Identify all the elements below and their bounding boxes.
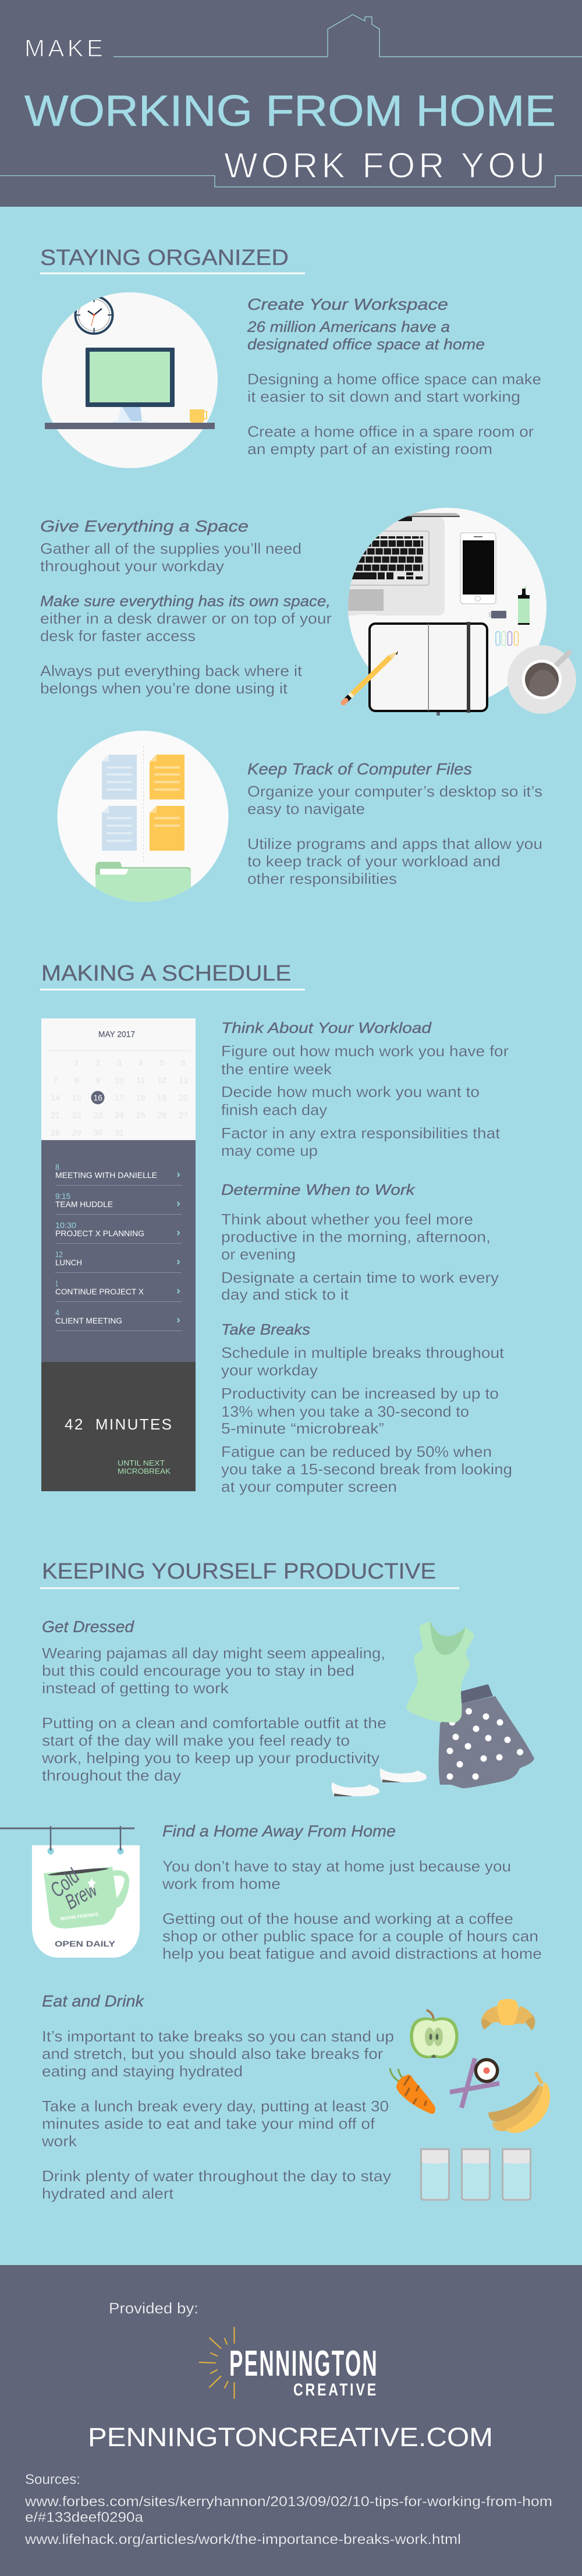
- text block: take breaks: Productivity can be increased by up to: [221, 1385, 499, 1402]
- schedule list: [41, 1140, 196, 1362]
- text block: get dressed: Get Dressed: [42, 1618, 134, 1636]
- text block: determine when to work: Determine When to Work: [221, 1181, 416, 1198]
- schedule list: TEAM HUDDLE: [55, 1200, 113, 1209]
- calendar month view: 2: [95, 1058, 100, 1067]
- text block: find a home away from home: Getting out of the house and working at a coffee: [162, 1910, 513, 1927]
- calendar month view: 25: [136, 1110, 146, 1120]
- calendar month view: [41, 1018, 196, 1140]
- calendar month view: 17: [115, 1093, 124, 1102]
- calendar month view: 26: [158, 1110, 166, 1120]
- text block: create your workspace: Create a home office in a spare room or: [247, 423, 534, 440]
- sources: Sources:: [25, 2472, 80, 2487]
- text block: get dressed: work, helping you to keep up your productivity: [41, 1749, 379, 1767]
- calendar month view: 14: [51, 1093, 60, 1102]
- logo: pennington creative: [199, 2327, 378, 2400]
- sources: [24, 2472, 552, 2547]
- icon: cold brew mug: Cold: [45, 1864, 84, 1902]
- text block: determine when to work: Designate a certain time to work every: [221, 1269, 499, 1286]
- text block: give everything a space: Always put everything back where it: [40, 662, 303, 680]
- icon: water glasses: [421, 2149, 531, 2200]
- text block: create your workspace: Create Your Workspace: [247, 295, 448, 313]
- text block: give everything a space: desk for faster access: [40, 627, 196, 645]
- text block: take breaks: 13% when you take a 30-second to: [221, 1403, 469, 1420]
- calendar month view: 21: [51, 1110, 60, 1120]
- text block: take breaks: Take Breaks: [221, 1321, 310, 1338]
- text block: give everything a space: belongs when you’re done using it: [40, 680, 288, 697]
- text block: find a home away from home: shop or other public space for a couple of hours can: [162, 1927, 538, 1945]
- calendar month view: 23: [94, 1110, 102, 1120]
- text block: eat and drink: Eat and Drink: [42, 1992, 145, 2010]
- calendar month view: 8: [74, 1075, 79, 1085]
- schedule list: 9:15: [55, 1191, 70, 1201]
- text block: eat and drink: work: [41, 2132, 77, 2150]
- text block: think about your workload: finish each day: [221, 1101, 327, 1119]
- icon: usb drive: [489, 611, 506, 618]
- text block: get dressed: throughout the day: [42, 1767, 181, 1784]
- calendar month view: 16: [94, 1093, 102, 1102]
- icon: coffee cup: [508, 645, 576, 714]
- text block: find a home away from home: work from home: [162, 1875, 281, 1892]
- calendar month view: 31: [115, 1128, 124, 1137]
- calendar month view: 20: [179, 1093, 188, 1102]
- microbreak countdown: 42 MINUTES: [65, 1416, 172, 1433]
- heading: making a schedule: MAKING A SCHEDULE: [41, 961, 291, 986]
- title: working from home: WORKING FROM HOME: [24, 86, 556, 135]
- heading: keeping yourself productive: KEEPING YOURSELF PRODUCTIVE: [42, 1559, 436, 1584]
- calendar month view: 11: [136, 1075, 145, 1085]
- icon: smartphone: [460, 533, 496, 604]
- provided by label: Provided by:: [109, 2299, 198, 2317]
- icon: polka dot skirt: [439, 1685, 534, 1788]
- text block: take breaks: [221, 1321, 512, 1495]
- text block: get dressed: Putting on a clean and comfortable outfit at the: [42, 1714, 386, 1732]
- text block: give everything a space: Give Everything a Space: [40, 517, 249, 535]
- sources: www.lifehack.org/articles/work/the-importance-breaks-work.html: [24, 2532, 461, 2547]
- text block: keep track of computer files: easy to navigate: [247, 800, 365, 818]
- icon: yellow document: [150, 755, 184, 799]
- schedule list: 10:30: [55, 1220, 76, 1230]
- text block: keep track of computer files: [247, 760, 542, 887]
- illustration: computer files and folder: [57, 731, 228, 908]
- text block: eat and drink: [41, 1992, 394, 2202]
- calendar month view: 1: [74, 1058, 79, 1067]
- text block: determine when to work: or evening: [221, 1245, 296, 1263]
- schedule list: CLIENT MEETING: [55, 1317, 122, 1325]
- text block: eat and drink: hydrated and alert: [42, 2185, 174, 2202]
- icon: wall clock: [76, 296, 113, 334]
- text block: create your workspace: designated office space at home: [247, 335, 485, 353]
- text block: give everything a space: Gather all of the supplies you’ll need: [40, 540, 301, 557]
- icon: apple half: [410, 2010, 459, 2058]
- title: make: MAKE: [24, 34, 103, 62]
- schedule list: LUNCH: [55, 1258, 82, 1267]
- text block: keep track of computer files: Organize your computer’s desktop so it’s: [247, 783, 542, 800]
- text block: eat and drink: Drink plenty of water throughout the day to stay: [42, 2167, 391, 2185]
- calendar app panel: [41, 1018, 196, 1491]
- icon: yellow mug: [190, 409, 207, 423]
- icon: green folder: [95, 862, 191, 902]
- icon: carrot: [390, 2068, 435, 2114]
- text block: take breaks: your workday: [221, 1361, 318, 1379]
- calendar month view: 24: [115, 1110, 124, 1120]
- text block: eat and drink: minutes aside to eat and take your mind off of: [42, 2115, 375, 2132]
- calendar month view: MAY 2017: [98, 1030, 135, 1039]
- icon: highlighter: [518, 586, 530, 625]
- illustration: outfit: [332, 1621, 534, 1796]
- calendar month view: 13: [179, 1075, 188, 1085]
- text block: get dressed: instead of getting to work: [42, 1679, 229, 1697]
- schedule list: 12: [55, 1250, 63, 1259]
- text block: eat and drink: Take a lunch break every day, putting at least 30: [42, 2097, 389, 2115]
- calendar month view: 6: [181, 1058, 186, 1067]
- calendar month view: 19: [158, 1093, 166, 1102]
- text block: get dressed: but this could encourage you to stay in bed: [42, 1662, 354, 1679]
- text block: think about your workload: [221, 1019, 509, 1159]
- microbreak countdown: UNTIL NEXT: [118, 1459, 165, 1467]
- text block: create your workspace: Designing a home office space can make: [247, 370, 541, 388]
- icon: yellow document 2: [150, 806, 184, 851]
- text block: think about your workload: Factor in any extra responsibilities that: [221, 1124, 501, 1142]
- illustration: coffee shop sign: OPEN DAILY: [55, 1939, 116, 1948]
- calendar month view: 29: [72, 1128, 81, 1137]
- icon: pencil: [343, 651, 398, 703]
- schedule list: 4: [55, 1308, 59, 1317]
- calendar month view: 12: [158, 1075, 166, 1085]
- text block: give everything a space: either in a desk drawer or on top of your: [40, 610, 332, 627]
- text block: take breaks: Schedule in multiple breaks throughout: [221, 1344, 505, 1361]
- sources: www.forbes.com/sites/kerryhannon/2013/09/02/10-tips-for-working-from-hom: [24, 2494, 552, 2510]
- icon: cold brew mug: WARM FRIENDS: [60, 1912, 99, 1922]
- text block: think about your workload: Decide how much work you want to: [221, 1083, 480, 1101]
- header banner: [0, 0, 582, 207]
- text block: take breaks: at your computer screen: [221, 1478, 397, 1495]
- text block: find a home away from home: You don’t have to stay at home just because you: [162, 1857, 511, 1875]
- text block: give everything a space: [40, 517, 332, 697]
- text block: think about your workload: may come up: [221, 1142, 318, 1159]
- calendar month view: 5: [159, 1058, 164, 1067]
- icon: blue document 2: [102, 806, 137, 851]
- house outline line: [113, 15, 582, 57]
- text block: eat and drink: and stretch, but you should also take breaks for: [42, 2045, 383, 2062]
- title: work for you: WORK FOR YOU: [224, 146, 545, 185]
- calendar month view: 30: [94, 1128, 102, 1137]
- text block: create your workspace: an empty part of an existing room: [247, 440, 492, 458]
- text block: create your workspace: it easier to sit down and start working: [247, 388, 520, 405]
- illustration: coffee shop sign: [0, 1826, 140, 1958]
- schedule list: CONTINUE PROJECT X: [55, 1287, 144, 1296]
- illustration: desktop flat lay: [326, 508, 576, 716]
- icon: paper clips: [496, 631, 518, 645]
- sign holes: [48, 1848, 123, 1855]
- text block: determine when to work: productive in the morning, afternoon,: [221, 1228, 491, 1245]
- calendar month view: 7: [53, 1075, 58, 1085]
- website url: PENNINGTONCREATIVE.COM: [88, 2422, 493, 2452]
- text block: keep track of computer files: other responsibilities: [247, 870, 397, 887]
- calendar month view: 18: [136, 1093, 146, 1102]
- text block: get dressed: [41, 1618, 386, 1784]
- logo: pennington creative: CREATIVE: [293, 2380, 378, 2400]
- text block: think about your workload: Figure out how much work you have for: [221, 1042, 509, 1060]
- text block: eat and drink: eating and staying hydrated: [42, 2062, 243, 2080]
- sign hangers: [51, 1826, 120, 1850]
- calendar month view: 4: [139, 1058, 143, 1067]
- microbreak countdown: MICROBREAK: [118, 1467, 171, 1475]
- sources: e/#133deef0290a: [25, 2510, 144, 2525]
- text block: find a home away from home: help you beat fatigue and avoid distractions at home: [162, 1945, 542, 1962]
- icon: green tank top: [406, 1621, 474, 1722]
- text block: find a home away from home: Find a Home Away From Home: [162, 1822, 396, 1840]
- illustration: food and water: [390, 1999, 550, 2200]
- calendar month view: 3: [117, 1058, 122, 1067]
- footer panel: [0, 2265, 582, 2576]
- icon: white flats: [332, 1768, 427, 1796]
- text block: determine when to work: day and stick to it: [221, 1286, 349, 1303]
- text block: think about your workload: Think About Your Workload: [221, 1019, 432, 1036]
- calendar month view: 27: [179, 1110, 188, 1120]
- text block: eat and drink: It’s important to take breaks so you can stand up: [42, 2027, 394, 2045]
- icon: monitor: [86, 348, 175, 423]
- calendar month view: 15: [72, 1093, 81, 1102]
- text block: keep track of computer files: Utilize programs and apps that allow you: [247, 835, 542, 852]
- text block: find a home away from home: [162, 1822, 542, 1962]
- icon: croissant: [481, 1999, 535, 2030]
- sign board: [32, 1845, 140, 1958]
- calendar month view: 9: [95, 1075, 100, 1085]
- text block: determine when to work: [221, 1181, 499, 1303]
- text block: think about your workload: the entire week: [221, 1060, 332, 1078]
- text block: get dressed: start of the day will make you feel ready to: [42, 1732, 350, 1749]
- text block: take breaks: Fatigue can be reduced by 50% when: [221, 1443, 492, 1460]
- icon: notebook: [370, 622, 487, 716]
- schedule list: 8: [55, 1162, 59, 1172]
- schedule list: MEETING WITH DANIELLE: [55, 1171, 157, 1180]
- icon: cold brew mug: [44, 1864, 129, 1929]
- icon: bananas: [488, 2072, 550, 2133]
- bracket line under title: [0, 176, 582, 187]
- text block: get dressed: Wearing pajamas all day might seem appealing,: [42, 1644, 385, 1662]
- text block: keep track of computer files: to keep track of your workload and: [247, 852, 501, 870]
- calendar month view: 10: [115, 1075, 124, 1085]
- illustration: desk with monitor, clock and mug: [42, 292, 218, 468]
- icon: blue document: [102, 755, 137, 799]
- text block: create your workspace: [247, 295, 541, 458]
- icon: laptop: [348, 513, 460, 615]
- text block: keep track of computer files: Keep Track of Computer Files: [247, 760, 472, 778]
- logo: pennington creative: PENNINGTON: [229, 2344, 378, 2384]
- text block: give everything a space: throughout your workday: [40, 557, 224, 575]
- schedule list: 1: [55, 1279, 58, 1288]
- text block: determine when to work: Think about whether you feel more: [221, 1211, 473, 1228]
- heading: staying organized: STAYING ORGANIZED: [40, 246, 289, 270]
- text block: take breaks: 5-minute “microbreak”: [221, 1420, 384, 1437]
- microbreak countdown: [41, 1362, 196, 1491]
- schedule list: PROJECT X PLANNING: [55, 1229, 144, 1238]
- calendar month view: 28: [51, 1128, 60, 1137]
- icon: cold brew mug: Brew: [61, 1877, 102, 1914]
- calendar month view: 22: [72, 1110, 81, 1120]
- text block: take breaks: you take a 15-second break from looking: [221, 1460, 512, 1478]
- text block: create your workspace: 26 million Americans have a: [247, 318, 450, 335]
- icon: sushi and chopsticks: [450, 2058, 499, 2108]
- text block: give everything a space: Make sure everything has its own space,: [40, 592, 331, 610]
